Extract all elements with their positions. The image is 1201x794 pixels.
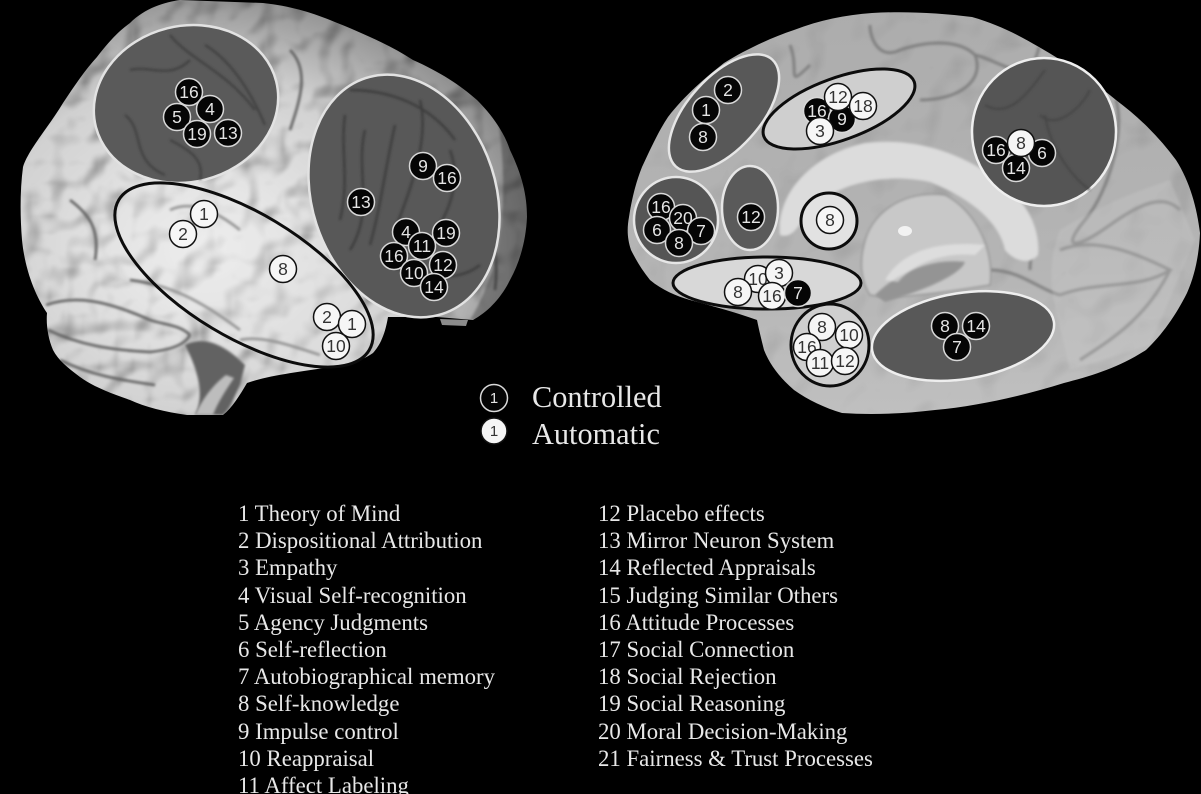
key: processes 12 to 21: 21 Fairness & Trust Processes xyxy=(598,746,873,771)
numbered markers: left brain: 1 xyxy=(347,314,357,334)
numbered markers: right brain: 12 xyxy=(828,87,848,107)
numbered markers: right brain: 8 xyxy=(674,233,684,253)
numbered markers: left brain: 14 xyxy=(424,277,444,297)
numbered markers: left brain: 11 xyxy=(413,236,431,256)
legend: Controlled xyxy=(532,380,662,414)
numbered markers: right brain: 12 xyxy=(835,351,855,371)
region: temporal outline xyxy=(87,147,401,403)
key: processes 1 to 11: 1 Theory of Mind xyxy=(238,501,400,526)
key: processes 1 to 11: 9 Impulse control xyxy=(238,719,399,744)
numbered markers: right brain: 7 xyxy=(793,283,803,303)
numbered markers: right brain: 14 xyxy=(1006,158,1026,178)
numbered markers: right brain: 6 xyxy=(1037,143,1047,163)
numbered markers: right brain: 8 xyxy=(733,282,743,302)
figure: brain maps xyxy=(20,0,1200,444)
numbered markers: left brain: 8 xyxy=(278,259,288,279)
legend: 1 xyxy=(490,390,498,407)
numbered markers: right brain: 8 xyxy=(817,317,827,337)
numbered markers: left brain: 1 xyxy=(199,204,209,224)
legend: 1 xyxy=(490,423,498,440)
region: ventromedial prefrontal xyxy=(634,177,718,263)
numbered markers: left brain: 4 xyxy=(205,99,215,119)
key: processes 12 to 21: 13 Mirror Neuron System xyxy=(598,528,834,553)
numbered markers: right brain: 1 xyxy=(701,100,711,120)
legend xyxy=(480,380,662,451)
numbered markers: left brain: 16 xyxy=(179,82,199,102)
numbered markers: right brain: 6 xyxy=(652,220,662,240)
key: processes 1 to 11: 5 Agency Judgments xyxy=(238,610,428,635)
region: anterior cingulate outline xyxy=(753,53,925,165)
region: subgenual cingulate xyxy=(722,166,778,250)
numbered markers: right brain: 7 xyxy=(952,337,962,357)
numbered markers: left brain: 12 xyxy=(433,255,453,275)
region: upper parietal xyxy=(77,6,295,202)
numbered markers: right brain: 8 xyxy=(940,316,950,336)
numbered markers: right brain: 8 xyxy=(1016,133,1026,153)
key: processes 1 to 11 xyxy=(238,501,495,794)
numbered markers: right brain: 16 xyxy=(797,337,817,357)
numbered markers: left brain: 9 xyxy=(418,156,428,176)
numbered markers: left brain: 2 xyxy=(178,224,188,244)
numbered markers: right brain: 8 xyxy=(825,210,835,230)
numbered markers: left brain: 16 xyxy=(384,246,404,266)
key: processes 1 to 11: 4 Visual Self-recognition xyxy=(238,583,467,608)
key: processes 12 to 21: 19 Social Reasoning xyxy=(598,691,785,716)
numbered markers: left brain: 10 xyxy=(404,263,424,283)
left lateral brain xyxy=(0,0,540,430)
numbered markers: left brain: 10 xyxy=(326,336,346,356)
key: processes 12 to 21: 17 Social Connection xyxy=(598,637,794,662)
numbered markers: right brain: 20 xyxy=(673,208,693,228)
numbered markers: right brain: 8 xyxy=(698,127,708,147)
numbered markers: left brain xyxy=(164,78,460,360)
key: processes 1 to 11: 10 Reappraisal xyxy=(238,746,374,771)
region: orbitofrontal outline xyxy=(673,257,861,309)
region: medial temporal xyxy=(865,279,1061,393)
numbered markers: right brain: 3 xyxy=(815,121,825,141)
numbered markers: left brain: 16 xyxy=(437,168,457,188)
numbered markers: right brain: 7 xyxy=(696,221,706,241)
numbered markers: left brain: 19 xyxy=(436,223,456,243)
numbered markers: right brain: 18 xyxy=(853,96,873,116)
region: amygdala outline xyxy=(791,304,869,386)
numbered markers: left brain: 19 xyxy=(187,124,207,144)
key: processes 1 to 11: 3 Empathy xyxy=(238,555,337,580)
numbered markers: right brain: 3 xyxy=(774,263,784,283)
key: processes 12 to 21: 16 Attitude Processes xyxy=(598,610,794,635)
region: septal outline xyxy=(801,193,857,249)
key: processes 12 to 21: 20 Moral Decision-Making xyxy=(598,719,847,744)
key: processes 1 to 11: 8 Self-knowledge xyxy=(238,691,399,716)
numbered markers: right brain: 9 xyxy=(837,109,847,129)
key: processes 12 to 21 xyxy=(598,501,873,771)
numbered markers: right brain: 16 xyxy=(807,101,827,121)
numbered markers: right brain: 11 xyxy=(811,353,829,373)
key: processes 1 to 11: 6 Self-reflection xyxy=(238,637,387,662)
numbered markers: left brain: 13 xyxy=(218,123,238,143)
numbered markers: right brain: 16 xyxy=(651,197,671,217)
key: processes 12 to 21: 12 Placebo effects xyxy=(598,501,765,526)
region: precuneus xyxy=(972,58,1116,206)
numbered markers: left brain: 4 xyxy=(401,222,411,242)
numbered markers: right brain: 16 xyxy=(986,140,1006,160)
numbered markers: right brain: 10 xyxy=(748,269,768,289)
numbered markers: right brain xyxy=(644,76,1056,376)
numbered markers: right brain: 10 xyxy=(839,325,859,345)
key: processes 12 to 21: 15 Judging Similar Others xyxy=(598,583,838,608)
numbered markers: right brain: 12 xyxy=(741,207,761,227)
numbered markers: right brain: 16 xyxy=(762,286,782,306)
key: processes 1 to 11: 2 Dispositional Attribution xyxy=(238,528,482,553)
numbered markers: right brain: 2 xyxy=(723,80,733,100)
region: prefrontal xyxy=(278,50,530,342)
right medial brain xyxy=(620,0,1201,420)
key: processes 12 to 21: 14 Reflected Appraisals xyxy=(598,555,816,580)
numbered markers: left brain: 13 xyxy=(351,192,371,212)
region: dorsomedial prefrontal xyxy=(649,35,799,191)
key: processes 1 to 11: 7 Autobiographical memory xyxy=(238,664,495,689)
numbered markers: right brain: 14 xyxy=(966,316,986,336)
key: processes 12 to 21: 18 Social Rejection xyxy=(598,664,777,689)
legend: Automatic xyxy=(532,417,660,451)
numbered markers: left brain: 5 xyxy=(172,107,182,127)
numbered markers: left brain: 2 xyxy=(322,307,332,327)
